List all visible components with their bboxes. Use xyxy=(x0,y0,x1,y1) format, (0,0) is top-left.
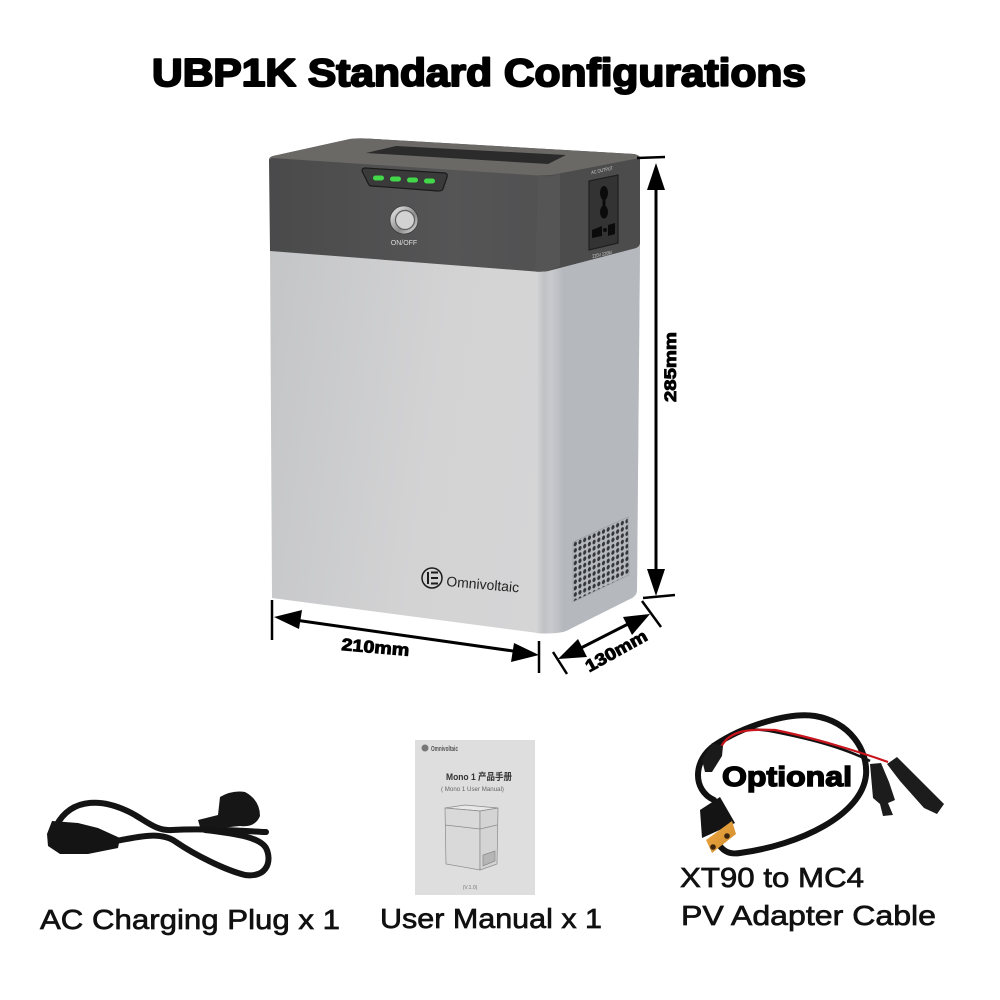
title: UBP1K Standard Configurations xyxy=(152,52,806,95)
manual subtitle: ( Mono 1 User Manual) xyxy=(441,786,504,793)
label: XT90 to MC4 PV adapter cable: XT90 to MC4 xyxy=(680,862,864,893)
label: XT90 to MC4 PV adapter cable xyxy=(680,862,936,931)
dimension: 285mm height xyxy=(637,157,680,598)
battery silver body xyxy=(270,245,640,634)
label: user manual: User Manual x 1 xyxy=(380,903,602,934)
manual title: Mono 1 产品手册 xyxy=(446,771,512,783)
label: XT90 to MC4 PV adapter cable: PV Adapter Cable xyxy=(681,900,936,931)
dimension: 210mm width: 210mm xyxy=(341,635,410,660)
power button xyxy=(390,206,418,247)
dimension: 130mm depth: 130mm xyxy=(582,626,651,676)
power button: ON/OFF xyxy=(391,240,417,247)
AC output socket: AC OUTPUT xyxy=(591,166,614,176)
icon: XT90 to MC4 cable xyxy=(698,715,944,853)
manual logo xyxy=(422,744,458,753)
ventilation grille xyxy=(573,517,629,602)
product: battery unit xyxy=(269,138,640,634)
icon: AC power cord xyxy=(47,792,268,875)
manual logo: Omnivoltaic xyxy=(431,746,458,753)
battery dark top cap xyxy=(269,138,640,272)
label: AC charging plug: AC Charging Plug x 1 xyxy=(40,904,340,935)
AC output socket: 220V 220W xyxy=(592,250,613,260)
brand logo: Omnivoltaic xyxy=(446,573,520,595)
dimension: 130mm depth xyxy=(553,601,661,676)
dimension: 285mm height: 285mm xyxy=(661,332,680,402)
label: optional: Optional xyxy=(722,761,852,792)
manual version: (V.1.0) xyxy=(463,885,478,891)
icon: user manual booklet xyxy=(415,740,535,895)
dimension: 210mm width xyxy=(272,600,539,673)
brand logo xyxy=(422,568,520,595)
manual battery drawing xyxy=(445,805,498,870)
LED battery indicator xyxy=(362,168,447,191)
AC output socket xyxy=(589,166,618,260)
